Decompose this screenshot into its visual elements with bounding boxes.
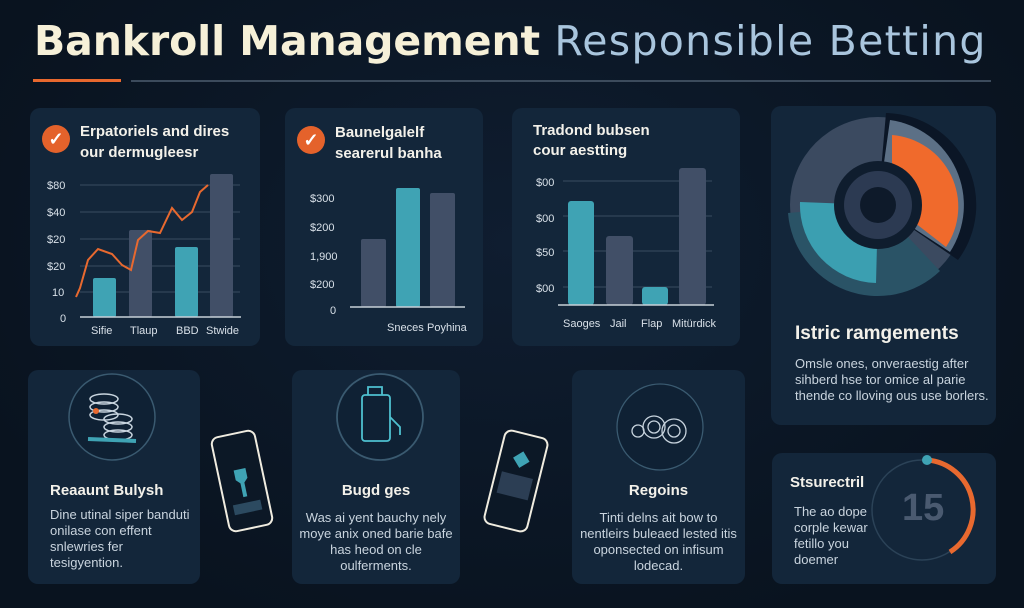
chart 2: 0 bbox=[330, 305, 336, 317]
chart 1: $20 bbox=[47, 234, 65, 246]
heading: Bugd ges bbox=[342, 482, 410, 499]
chart 3: Flap bbox=[641, 318, 662, 330]
chart 2: $200 bbox=[310, 279, 334, 291]
text: Tinti delns ait bow to nentleirs buleaed lested itis oponsected on infisum lodecad. bbox=[580, 510, 737, 573]
icon: coin stack bbox=[69, 374, 155, 460]
heading: Tradond bubsen bbox=[533, 122, 650, 139]
chart 1: Sifie bbox=[91, 325, 112, 337]
chart 1 bbox=[47, 174, 241, 337]
chart 1: 10 bbox=[52, 287, 64, 299]
icon: phone 2 bbox=[483, 429, 549, 533]
panel: bar chart 2 bbox=[285, 108, 483, 346]
chart 1: Stwide bbox=[206, 325, 239, 337]
chart 2: $200 bbox=[310, 222, 334, 234]
chart 2: Poyhina bbox=[427, 322, 468, 334]
chart 3: Jail bbox=[610, 318, 627, 330]
chart 3: Saoges bbox=[563, 318, 601, 330]
text: Dine utinal siper banduti onilase con effent snlewries fer tesigyention. bbox=[50, 507, 189, 570]
chart 1: $80 bbox=[47, 180, 65, 192]
chart 3: $00 bbox=[536, 283, 554, 295]
heading: Erpatoriels and dires bbox=[80, 123, 229, 140]
chart 1: $40 bbox=[47, 207, 65, 219]
icon: check badge: ✓ bbox=[303, 130, 319, 150]
chart 2: Sneces bbox=[387, 322, 424, 334]
title underline bbox=[33, 79, 121, 82]
icon: gauge arc bbox=[872, 455, 973, 560]
icon: check badge: ✓ bbox=[48, 129, 64, 149]
heading: Baunelgalelf searerul banha bbox=[335, 124, 442, 162]
chart 2: $300 bbox=[310, 193, 334, 205]
icon: rolls bbox=[617, 384, 703, 470]
panel: bottom 3 bbox=[572, 370, 745, 584]
panel: donut bbox=[771, 106, 996, 425]
icon: check badge bbox=[297, 126, 325, 154]
heading bbox=[80, 123, 229, 161]
icon: phone 1 bbox=[211, 429, 273, 533]
panel: bottom 2 bbox=[292, 370, 460, 584]
heading: Stsurectril bbox=[790, 474, 864, 491]
chart 1: 0 bbox=[60, 313, 66, 325]
chart 2 bbox=[310, 188, 468, 334]
heading bbox=[533, 122, 650, 159]
text: Was ai yent bauchy nely moye anix oned barie bafe has heod on cle oulferments. bbox=[299, 510, 453, 573]
heading: Reaaunt Bulysh bbox=[50, 482, 163, 499]
icon: gas can bbox=[337, 374, 423, 460]
chart 3: $00 bbox=[536, 213, 554, 225]
icon: gauge arc: 15 bbox=[902, 487, 944, 529]
chart 3: $00 bbox=[536, 177, 554, 189]
heading: Istric ramgements bbox=[795, 323, 959, 344]
panel: bottom 1 bbox=[28, 370, 200, 584]
donut chart bbox=[788, 113, 976, 296]
heading: cour aestting bbox=[533, 142, 627, 159]
title: Bankroll Management Responsible Betting bbox=[34, 17, 987, 65]
chart 3: Mitürdick bbox=[672, 318, 717, 330]
chart 1: $20 bbox=[47, 261, 65, 273]
chart 2: 1,900 bbox=[310, 251, 338, 263]
chart 1: BBD bbox=[176, 325, 199, 337]
icon: check badge bbox=[42, 125, 70, 153]
heading: Regoins bbox=[629, 482, 688, 499]
chart 3: $50 bbox=[536, 247, 554, 259]
panel: bar chart 3 bbox=[512, 108, 740, 346]
chart 1: Tlaup bbox=[130, 325, 158, 337]
text: Omsle ones, onveraestig after sihberd hse tor omice al parie thende co lloving ous use borlers. bbox=[795, 356, 989, 403]
panel: bottom 4 bbox=[772, 453, 996, 584]
panel: line and bar chart bbox=[30, 108, 260, 346]
text: The ao dope corple kewar fetillo you doemer bbox=[794, 504, 868, 567]
chart 3 bbox=[536, 168, 717, 330]
heading: our dermugleesr bbox=[80, 144, 198, 161]
